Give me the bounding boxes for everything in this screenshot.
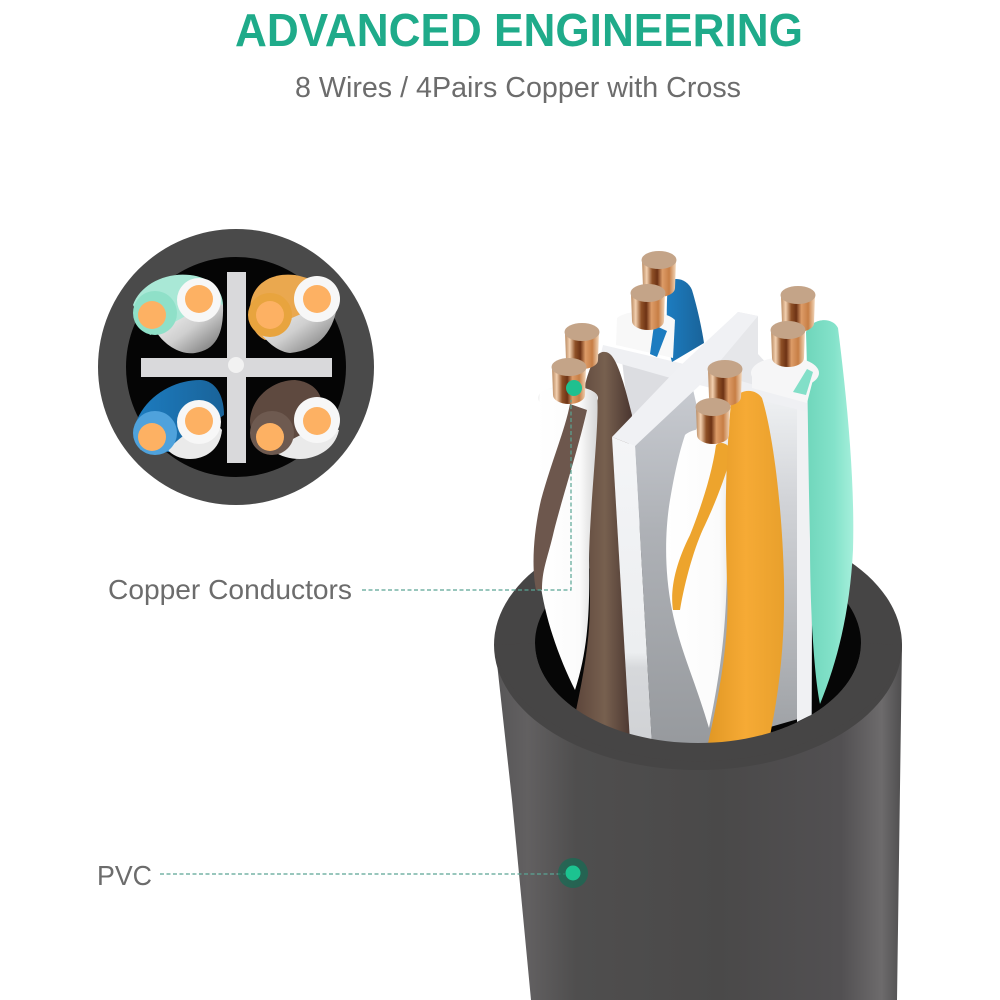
teal wires <box>751 320 853 704</box>
copper conductors <box>552 251 816 444</box>
inner cavity <box>126 257 346 477</box>
cross separator <box>141 272 332 463</box>
brown solid wire <box>572 352 632 745</box>
cable cross-section diagram <box>98 229 374 505</box>
blue wire pair <box>133 380 224 459</box>
outer jacket ring <box>98 229 374 505</box>
label: copper conductors: Copper Conductors <box>108 574 352 605</box>
brown wire pair <box>250 380 340 459</box>
label: PVC: PVC <box>97 860 152 891</box>
orange wires <box>666 391 784 749</box>
orange wire pair <box>248 275 340 353</box>
teal wire pair <box>133 275 223 353</box>
cross separator back arms <box>600 312 812 742</box>
marker dot: PVC <box>558 858 588 888</box>
leader line: copper conductors <box>362 400 571 590</box>
blue wires <box>616 279 704 362</box>
cross separator front panel <box>612 312 758 750</box>
title: ADVANCED ENGINEERING <box>235 4 803 56</box>
cable jacket back <box>494 520 902 1000</box>
leader line: PVC <box>160 873 565 875</box>
cable jacket front rim <box>495 643 902 761</box>
subtitle: 8 Wires / 4Pairs Copper with Cross <box>295 72 741 104</box>
white-brown wire <box>534 386 598 690</box>
